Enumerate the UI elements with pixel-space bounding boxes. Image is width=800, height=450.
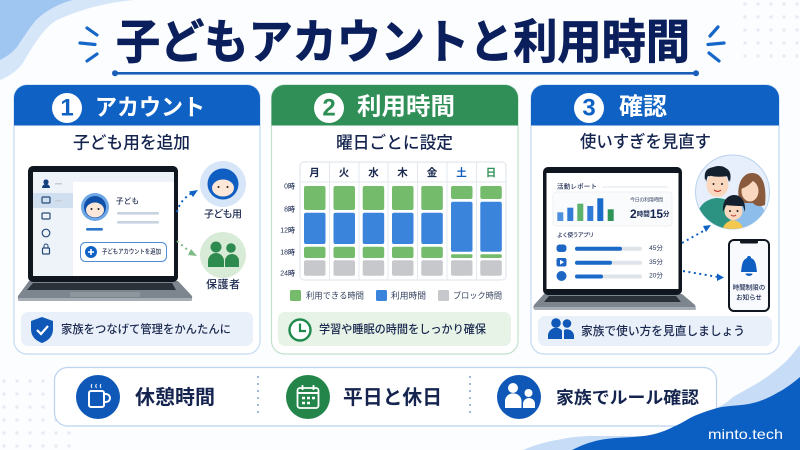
- laptop with activity report: [533, 167, 696, 310]
- frequently used apps: 45分: [649, 243, 663, 252]
- weekly schedule chart: 18時: [280, 248, 295, 256]
- guardian label: 保護者: [206, 277, 240, 291]
- panel 1 number badge: 1: [60, 94, 74, 122]
- weekly schedule chart: 24時: [280, 268, 295, 278]
- arrow to guardian: [177, 241, 197, 256]
- callout: review as family: 家族で使い方を見直しましょう: [581, 323, 745, 338]
- chart legend: 利用できる時間: [306, 290, 364, 300]
- report summary card: 2時間15分: [630, 207, 670, 221]
- arrow to family: [682, 225, 711, 243]
- title underline: [112, 70, 699, 76]
- add child account button: [80, 242, 166, 262]
- panel 1 subheading: 子ども用を追加: [73, 134, 190, 152]
- callout: study and sleep: [278, 312, 511, 346]
- arrow to child: [177, 190, 198, 212]
- callout: study and sleep: 学習や睡眠の時間をしっかり確保: [319, 322, 486, 336]
- add child account button: 子どもアカウントを追加: [102, 246, 161, 256]
- title sparks left: [80, 28, 97, 61]
- laptop with child account screen: [18, 166, 192, 301]
- panel: usage time: [272, 85, 518, 354]
- weekly schedule chart: [280, 162, 506, 280]
- title sparks right: [708, 27, 724, 61]
- label: confirm rules as family: 家族でルール確認: [556, 388, 699, 408]
- child avatar: [81, 193, 109, 221]
- panel 3 number badge: [574, 93, 604, 123]
- child icon: [200, 161, 246, 207]
- icon: coffee break: [76, 375, 120, 419]
- title: 子どもアカウントと利用時間: [116, 16, 690, 68]
- weekly schedule chart: 月: [309, 167, 320, 179]
- chart legend: 利用時間: [391, 290, 426, 300]
- callout: review as family: [538, 316, 772, 346]
- weekly schedule chart: 金: [427, 166, 438, 179]
- corner wave: [572, 377, 800, 450]
- child label: 子ども用: [204, 208, 242, 220]
- phone notification: 時間制限の: [733, 282, 765, 292]
- icon: calendar: [286, 375, 330, 419]
- frequently used apps: 20分: [649, 270, 663, 280]
- weekly schedule chart: 0時: [284, 182, 295, 190]
- report summary card: 今日の利用時間: [630, 196, 663, 204]
- panel: account: [14, 85, 260, 354]
- weekly schedule chart: 8時: [284, 204, 295, 214]
- weekly schedule chart: 木: [397, 166, 408, 179]
- bottom summary bar: [54, 368, 716, 426]
- frequently used apps: よく使うアプリ: [557, 231, 594, 239]
- chart legend: [290, 290, 502, 301]
- brand label: minto.tech: [708, 426, 783, 442]
- frequently used apps: [556, 231, 663, 281]
- panel 3 heading: 確認: [619, 94, 667, 120]
- child name label: 子ども: [116, 196, 139, 206]
- report summary card: [553, 192, 672, 226]
- panel 2 heading: 利用時間: [357, 94, 455, 120]
- guardian icon: [200, 232, 246, 278]
- frequently used apps: 35分: [649, 257, 663, 266]
- label: weekdays and holidays: 平日と休日: [343, 386, 442, 409]
- weekly schedule chart: 水: [368, 166, 379, 179]
- panel 3 number badge: 3: [582, 94, 596, 122]
- panel 2 subheading: 曜日ごとに設定: [336, 134, 453, 152]
- label: break time: 休憩時間: [135, 386, 215, 409]
- panel 2 number badge: [314, 93, 344, 123]
- panel 3 subheading: 使いすぎを見直す: [580, 132, 711, 152]
- phone notification: お知らせ: [736, 292, 762, 302]
- weekly schedule chart: 火: [339, 167, 350, 179]
- phone notification: [729, 240, 769, 311]
- arrow to phone: [683, 271, 724, 281]
- panel: review: [531, 85, 779, 354]
- weekly schedule chart: 12時: [280, 226, 295, 234]
- bell icon: [741, 256, 757, 276]
- icon: family rules: [497, 375, 541, 419]
- callout: family management: 家族をつなげて管理をかんたんに: [61, 322, 231, 336]
- panel 2 number badge: 2: [322, 94, 336, 122]
- panel 1 heading: アカウント: [95, 94, 205, 120]
- callout: family management: [21, 312, 253, 346]
- chart legend: ブロック時間: [453, 290, 502, 300]
- report title: 活動レポート: [557, 182, 597, 190]
- weekly schedule chart: 土: [456, 166, 467, 179]
- weekly schedule chart: 日: [486, 167, 496, 179]
- family illustration: [696, 155, 770, 235]
- panel 1 number badge: [52, 93, 82, 123]
